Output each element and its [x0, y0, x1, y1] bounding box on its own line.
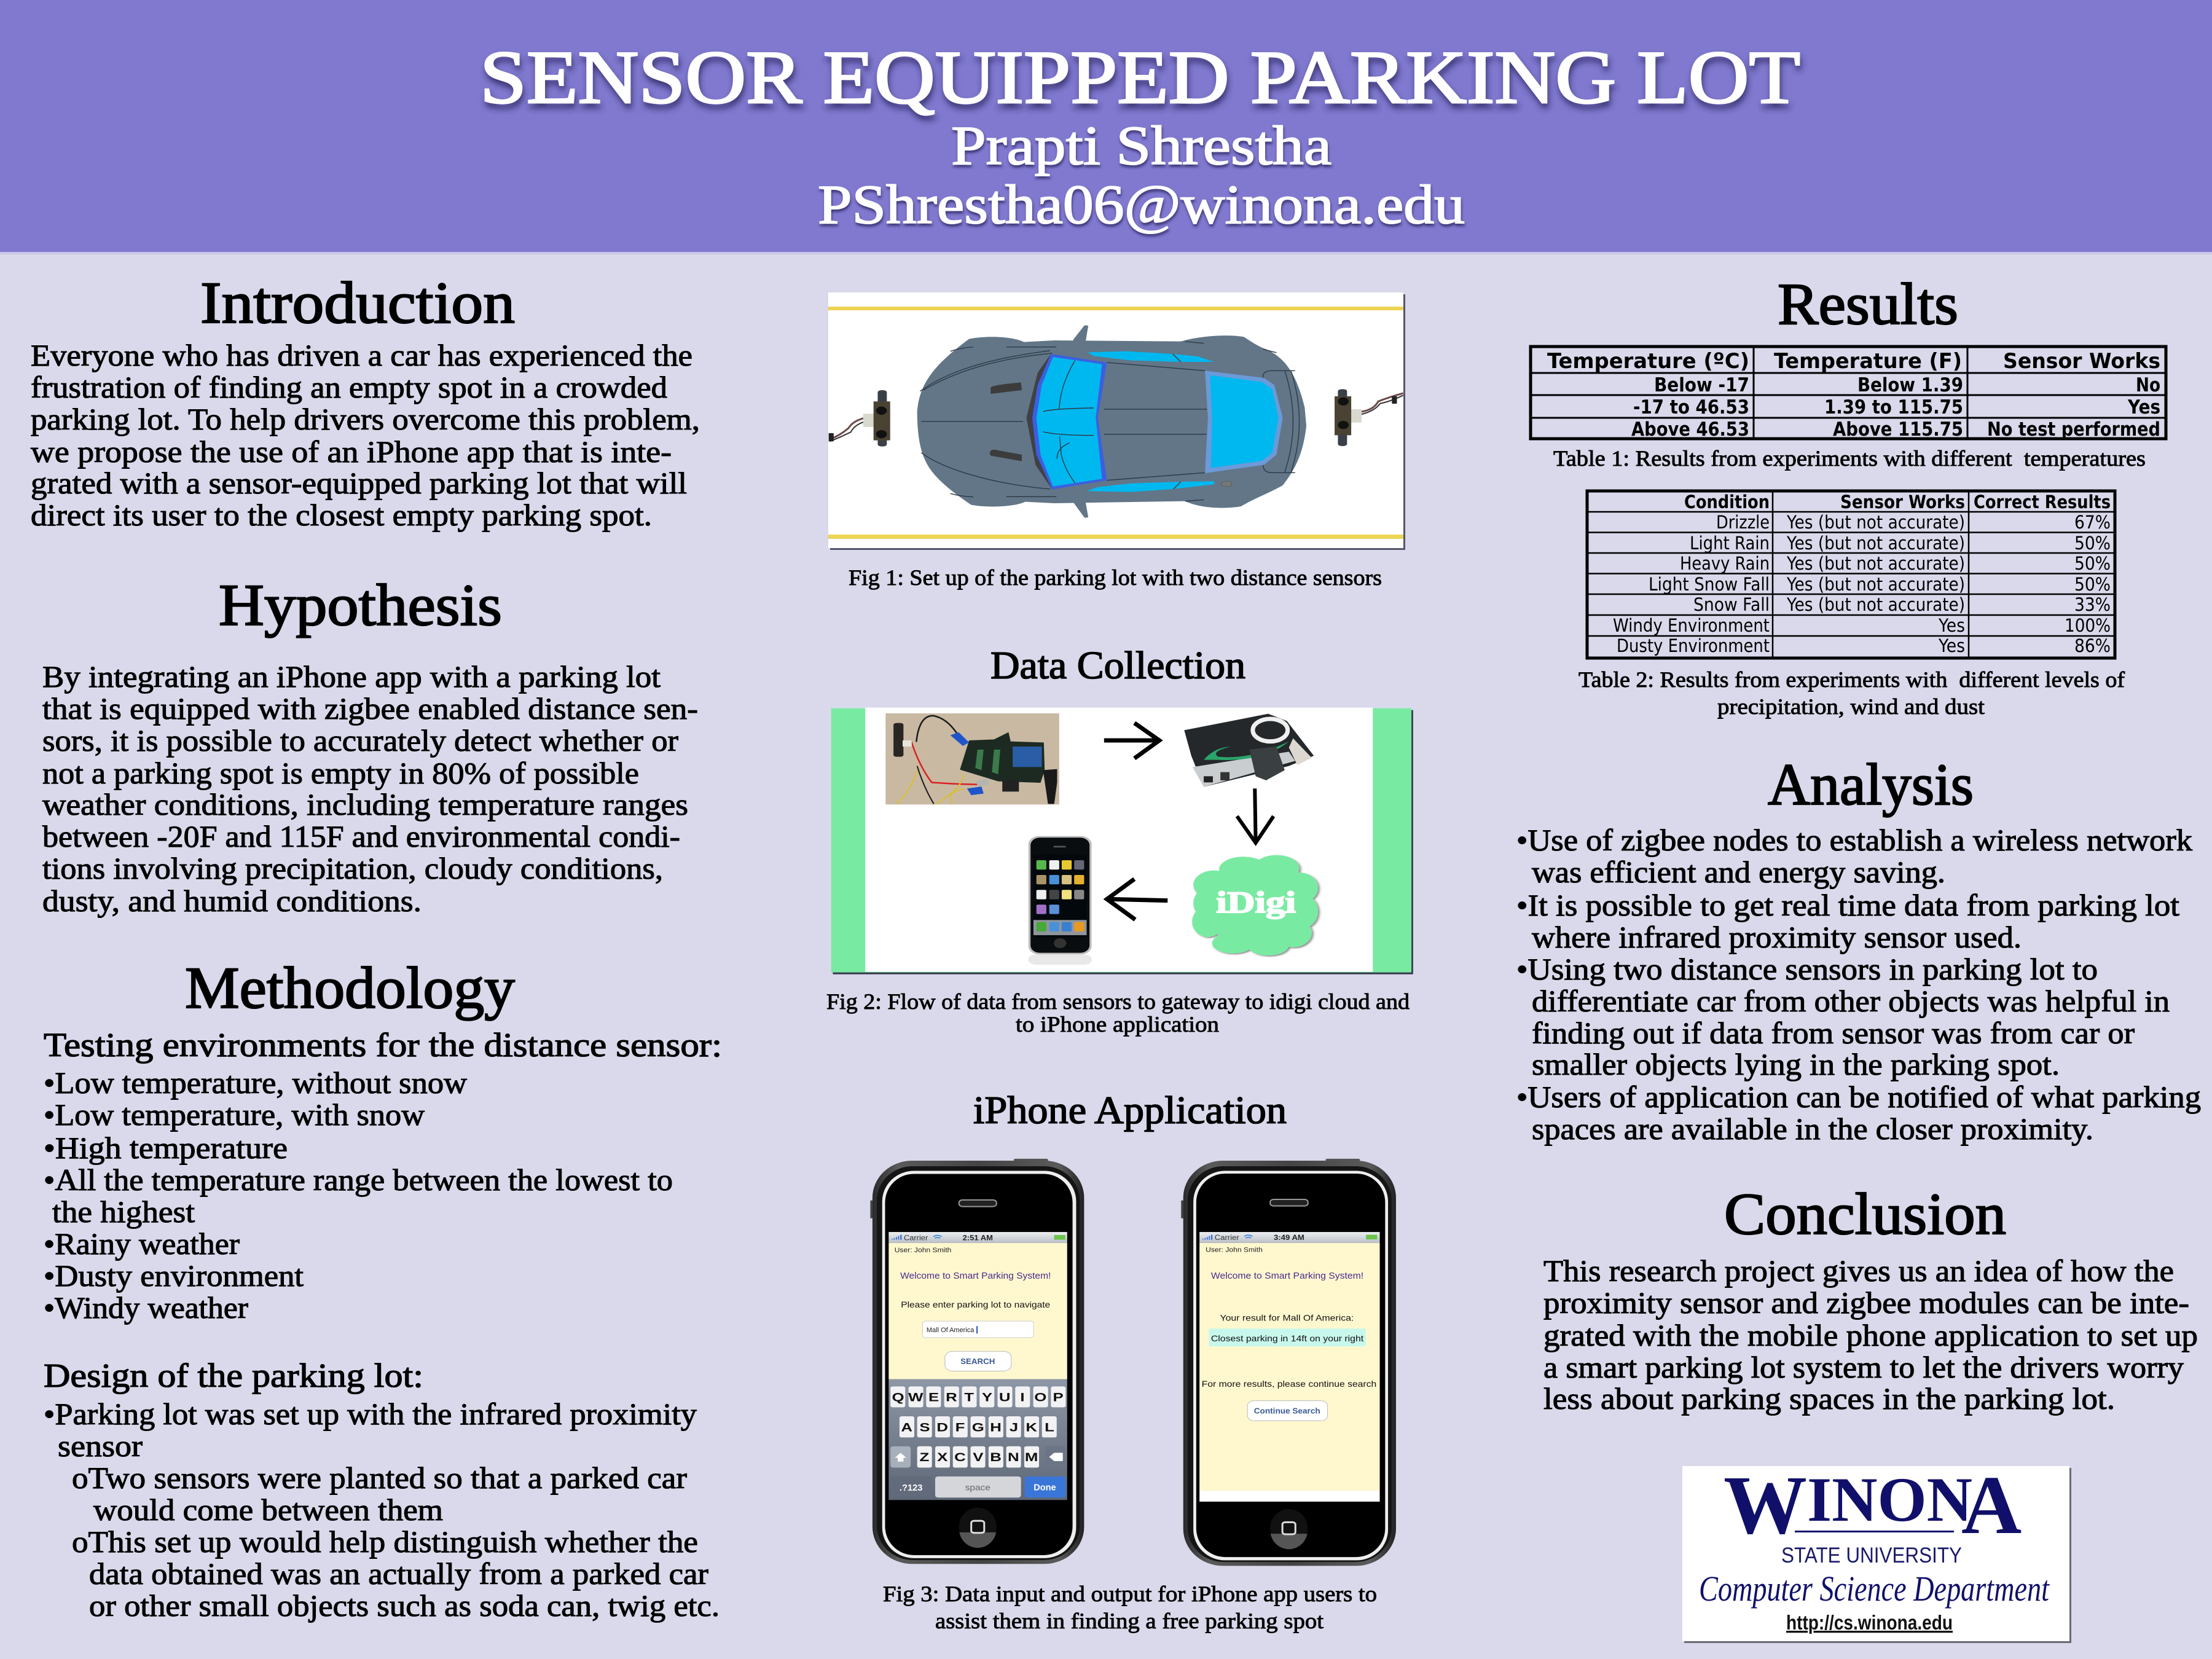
- iphone: input screen: Mall Of America: [927, 1327, 974, 1334]
- department url: http://cs.winona.edu: [1786, 1611, 1953, 1634]
- iphone: result screen: User: John Smith: [1206, 1246, 1263, 1253]
- text block: conclusion: [1543, 1253, 2198, 1416]
- panel: right column: [1516, 271, 2201, 1643]
- list: testing environments: the highest: [52, 1194, 195, 1229]
- list: design of the parking lot: oThis set up would help distinguish whether the: [72, 1524, 698, 1559]
- text block: introduction: parking lot. To help drivers overcome this problem,: [31, 402, 700, 436]
- iphone: input screen: SEARCH: [960, 1358, 995, 1367]
- photo: sensor and zigbee board: [885, 713, 1059, 804]
- heading: data collection: Data Collection: [990, 643, 1245, 687]
- list: design of the parking lot: [44, 1397, 720, 1623]
- iphone: result screen: Continue Search: [1254, 1407, 1320, 1416]
- table 2: weather results: Yes (but not accurate): [1786, 574, 1965, 595]
- list: testing environments: •Windy weather: [44, 1290, 248, 1325]
- keyboard: E: [928, 1390, 939, 1404]
- table 1: temperature results: Below -17: [1654, 374, 1749, 396]
- author name: Prapti Shrestha: [951, 116, 1332, 176]
- table 2: weather results: [1587, 491, 2115, 658]
- icon: idigi cloud: iDigi: [1216, 885, 1296, 919]
- keyboard: F: [955, 1421, 965, 1434]
- table 1: temperature results: [1531, 347, 2166, 441]
- heading: conclusion: Conclusion: [1724, 1181, 2006, 1247]
- iphone: result screen: Your result for Mall Of America:: [1220, 1314, 1354, 1323]
- list: analysis: •Use of zigbee nodes to establish a wireless network: [1516, 823, 2192, 857]
- keyboard: Q: [892, 1390, 904, 1404]
- keyboard: T: [964, 1390, 974, 1404]
- table 2: weather results: Snow Fall: [1693, 594, 1770, 615]
- text block: introduction: Everyone who has driven a car has experienced the: [31, 338, 692, 372]
- icon: iphone home screen: [1029, 836, 1092, 965]
- caption: figure 3: [883, 1582, 1377, 1633]
- table 2: weather results: 50%: [2074, 553, 2111, 574]
- text block: hypothesis: dusty, and humid conditions.: [42, 884, 422, 918]
- table 1: temperature results: Temperature (ºC): [1547, 349, 1749, 374]
- table 2: weather results: Yes (but not accurate): [1786, 594, 1965, 615]
- table 2: weather results: Condition: [1684, 492, 1770, 512]
- table 2: weather results: Dusty Environment: [1617, 635, 1770, 656]
- keyboard: L: [1045, 1421, 1054, 1434]
- logo wordmark: W: [1724, 1459, 1807, 1551]
- caption: figure 2: to iPhone application: [1016, 1012, 1219, 1037]
- title: SENSOR EQUIPPED PARKING LOT: [480, 35, 1800, 119]
- table 2: weather results: Drizzle: [1716, 512, 1770, 533]
- table 2: weather results: 50%: [2074, 533, 2111, 554]
- iphone: result screen: Carrier: [1215, 1234, 1239, 1242]
- table 1: temperature results: 1.39 to 115.75: [1824, 396, 1963, 418]
- keyboard: U: [999, 1390, 1011, 1404]
- table 2: weather results: Yes: [1938, 635, 1965, 656]
- list: testing environments: •All the temperature range between the lowest to: [44, 1163, 673, 1197]
- logo wordmark: A: [1961, 1459, 2022, 1551]
- text block: introduction: [31, 338, 700, 532]
- icon: idigi cloud: [1192, 855, 1318, 955]
- keyboard: D: [936, 1421, 948, 1434]
- iphone: input screen: [870, 1159, 1084, 1564]
- keyboard: B: [990, 1450, 1002, 1464]
- iphone: result screen: Closest parking in 14ft on your right: [1211, 1335, 1364, 1344]
- caption: figure 1: Fig 1: Set up of the parking lot with two distance sensors: [849, 565, 1382, 590]
- list: design of the parking lot: sensor: [58, 1429, 143, 1463]
- author email: PShrestha06@winona.edu: [818, 175, 1465, 235]
- list: testing environments: •Low temperature, without snow: [44, 1065, 467, 1100]
- subheading: testing environments: Testing environments for the distance sensor:: [44, 1026, 722, 1064]
- iphone: input screen: Welcome to Smart Parking System!: [900, 1271, 1051, 1281]
- table 2: weather results: Correct Results: [1974, 492, 2111, 512]
- text block: hypothesis: between -20F and 115F and environmental condi-: [42, 819, 680, 853]
- text block: conclusion: less about parking spaces in the parking lot.: [1543, 1381, 2115, 1416]
- keyboard: I: [1020, 1390, 1025, 1404]
- figure 2: data flow diagram: [831, 708, 1413, 975]
- icon: left distance sensor: [829, 390, 890, 447]
- list: analysis: spaces are available in the closer proximity.: [1532, 1112, 2093, 1146]
- table 1: temperature results: No test performed: [1987, 418, 2160, 441]
- list: analysis: smaller objects lying in the parking spot.: [1532, 1047, 2060, 1081]
- logo subtitle: STATE UNIVERSITY: [1781, 1543, 1962, 1567]
- iphone: input screen: User: John Smith: [895, 1247, 951, 1254]
- list: design of the parking lot: •Parking lot was set up with the infrared proximity: [44, 1397, 697, 1431]
- caption: figure 3: assist them in finding a free parking spot: [935, 1609, 1324, 1633]
- header banner: [0, 0, 2212, 254]
- list: testing environments: •Rainy weather: [44, 1226, 240, 1261]
- list: design of the parking lot: or other small objects such as soda can, twig etc.: [89, 1588, 720, 1623]
- keyboard: R: [946, 1390, 957, 1404]
- keyboard: K: [1026, 1421, 1037, 1434]
- text block: introduction: frustration of finding an empty spot in a crowded: [31, 370, 667, 404]
- department name: Computer Science Department: [1699, 1569, 2050, 1609]
- list: analysis: was efficient and energy saving.: [1532, 855, 1945, 889]
- keyboard: X: [937, 1450, 948, 1464]
- keyboard: .?123: [900, 1483, 922, 1492]
- caption: table 1: Table 1: Results from experiments with different temperatures: [1553, 446, 2146, 471]
- list: design of the parking lot: data obtained was an actually from a parked car: [89, 1556, 708, 1591]
- caption: table 2: precipitation, wind and dust: [1717, 694, 1985, 719]
- list: analysis: finding out if data from sensor was from car or: [1532, 1016, 2135, 1050]
- heading: hypothesis: Hypothesis: [219, 572, 502, 638]
- figure 3: iphone screens: [870, 1159, 1396, 1566]
- iphone: input screen: Please enter parking lot to navigate: [901, 1301, 1050, 1309]
- table 1: temperature results: Temperature (F): [1774, 349, 1962, 374]
- text block: conclusion: grated with the mobile phone application to set up: [1543, 1318, 2198, 1352]
- keyboard: space: [965, 1483, 990, 1492]
- text block: hypothesis: weather conditions, including temperature ranges: [42, 787, 688, 822]
- table 2: weather results: 50%: [2074, 574, 2111, 595]
- logo: winona state university computer science department: [1682, 1459, 2071, 1643]
- text block: introduction: we propose the use of an iPhone app that is inte-: [31, 434, 672, 469]
- keyboard: S: [919, 1421, 930, 1434]
- text block: introduction: direct its user to the closest empty parking spot.: [31, 498, 652, 532]
- table 1: temperature results: Yes: [2127, 396, 2160, 418]
- heading: methodology: Methodology: [185, 955, 515, 1021]
- iphone: result screen: Welcome to Smart Parking System!: [1211, 1271, 1363, 1281]
- text block: conclusion: This research project gives us an idea of how the: [1543, 1253, 2174, 1288]
- keyboard: O: [1034, 1390, 1046, 1404]
- list: analysis: •Users of application can be notified of what parking: [1516, 1080, 2201, 1114]
- table 2: weather results: 33%: [2074, 594, 2111, 615]
- table 2: weather results: Yes (but not accurate): [1786, 533, 1965, 554]
- panel: middle column: [826, 292, 1413, 1633]
- list: testing environments: •High temperature: [44, 1131, 288, 1165]
- panel: left column: [31, 270, 722, 1623]
- list: analysis: where infrared proximity sensor used.: [1532, 920, 2022, 954]
- list: analysis: •It is possible to get real time data from parking lot: [1516, 888, 2179, 922]
- heading: analysis: Analysis: [1768, 751, 1974, 817]
- caption: table 2: [1579, 667, 2125, 719]
- caption: figure 2: [826, 989, 1410, 1037]
- table 2: weather results: Yes: [1938, 615, 1965, 636]
- image: gateway device: [1184, 714, 1314, 787]
- keyboard: Y: [982, 1390, 992, 1404]
- text block: conclusion: proximity sensor and zigbee modules can be inte-: [1543, 1285, 2189, 1320]
- keyboard: V: [973, 1450, 984, 1464]
- table 1: temperature results: No: [2136, 374, 2160, 396]
- arrow: idigi to iphone: [1107, 879, 1167, 920]
- text block: hypothesis: that is equipped with zigbee enabled distance sen-: [42, 691, 698, 726]
- heading: results: Results: [1778, 271, 1958, 337]
- logo wordmark: INON: [1807, 1465, 1972, 1535]
- keyboard: Done: [1033, 1483, 1056, 1492]
- list: analysis: differentiate car from other objects was helpful in: [1532, 984, 2170, 1018]
- keyboard: A: [901, 1421, 912, 1434]
- table 2: weather results: Yes (but not accurate): [1786, 512, 1965, 533]
- arrow: gateway to idigi: [1237, 788, 1274, 843]
- list: analysis: •Using two distance sensors in parking lot to: [1516, 952, 2098, 986]
- table 1: temperature results: -17 to 46.53: [1633, 396, 1749, 418]
- table 1: temperature results: Above 46.53: [1631, 418, 1749, 441]
- table 2: weather results: 86%: [2074, 635, 2111, 656]
- icon: right distance sensor: [1335, 389, 1403, 446]
- list: design of the parking lot: oTwo sensors were planted so that a parked car: [72, 1461, 687, 1495]
- table 2: weather results: Heavy Rain: [1680, 553, 1770, 574]
- table 2: weather results: Sensor Works: [1840, 492, 1965, 512]
- table 1: temperature results: Below 1.39: [1857, 374, 1963, 396]
- arrow: sensor to gateway: [1104, 723, 1159, 758]
- iphone: input screen: Carrier: [904, 1234, 928, 1242]
- keyboard: P: [1053, 1390, 1064, 1404]
- keyboard: H: [990, 1421, 1002, 1434]
- text block: hypothesis: [42, 659, 698, 918]
- subheading: design of the parking lot: Design of the parking lot:: [44, 1357, 423, 1394]
- list: testing environments: •Dusty environment: [44, 1258, 304, 1293]
- iphone: result screen: 3:49 AM: [1274, 1234, 1304, 1242]
- caption: figure 2: Fig 2: Flow of data from sensors to gateway to idigi cloud and: [826, 989, 1410, 1014]
- keyboard: G: [972, 1421, 984, 1434]
- caption: table 2: Table 2: Results from experiments with different levels of: [1579, 667, 2125, 692]
- heading: introduction: Introduction: [200, 270, 515, 335]
- iphone: input screen: 2:51 AM: [963, 1234, 993, 1242]
- table 2: weather results: 100%: [2065, 615, 2111, 636]
- table 2: weather results: Windy Environment: [1613, 615, 1770, 636]
- keyboard: [890, 1386, 1065, 1497]
- table 2: weather results: 67%: [2074, 512, 2111, 533]
- text block: hypothesis: By integrating an iPhone app with a parking lot: [42, 659, 661, 694]
- keyboard: C: [954, 1450, 966, 1464]
- text block: hypothesis: sors, it is possible to accurately detect whether or: [42, 723, 678, 758]
- table 2: weather results: Yes (but not accurate): [1786, 553, 1965, 574]
- table 2: weather results: Light Rain: [1690, 533, 1770, 554]
- table 1: temperature results: Sensor Works: [2003, 349, 2160, 374]
- text block: conclusion: a smart parking lot system to let the drivers worry: [1543, 1350, 2184, 1384]
- heading: iphone application: iPhone Application: [973, 1088, 1287, 1132]
- text block: introduction: grated with a sensor-equipped parking lot that will: [31, 466, 687, 500]
- caption: figure 3: Fig 3: Data input and output for iPhone app users to: [883, 1582, 1377, 1606]
- keyboard: M: [1025, 1450, 1038, 1464]
- list: testing environments: [44, 1065, 673, 1325]
- figure 1: parking lot with two sensors: [828, 292, 1405, 550]
- keyboard: J: [1010, 1421, 1018, 1434]
- iphone: result screen: [1181, 1159, 1396, 1566]
- keyboard: Z: [920, 1450, 929, 1464]
- icon: car top view: [917, 325, 1306, 518]
- keyboard: W: [908, 1390, 924, 1404]
- iphone: result screen: For more results, please continue search: [1202, 1380, 1376, 1389]
- keyboard: N: [1008, 1450, 1019, 1464]
- text block: hypothesis: not a parking spot is empty in 80% of possible: [42, 756, 639, 790]
- table 2: weather results: Light Snow Fall: [1649, 574, 1770, 595]
- list: testing environments: •Low temperature, with snow: [44, 1097, 425, 1132]
- list: design of the parking lot: would come between them: [93, 1492, 443, 1527]
- text block: hypothesis: tions involving precipitation, cloudy conditions,: [42, 851, 663, 885]
- list: analysis: [1516, 823, 2201, 1146]
- table 1: temperature results: Above 115.75: [1833, 418, 1963, 441]
